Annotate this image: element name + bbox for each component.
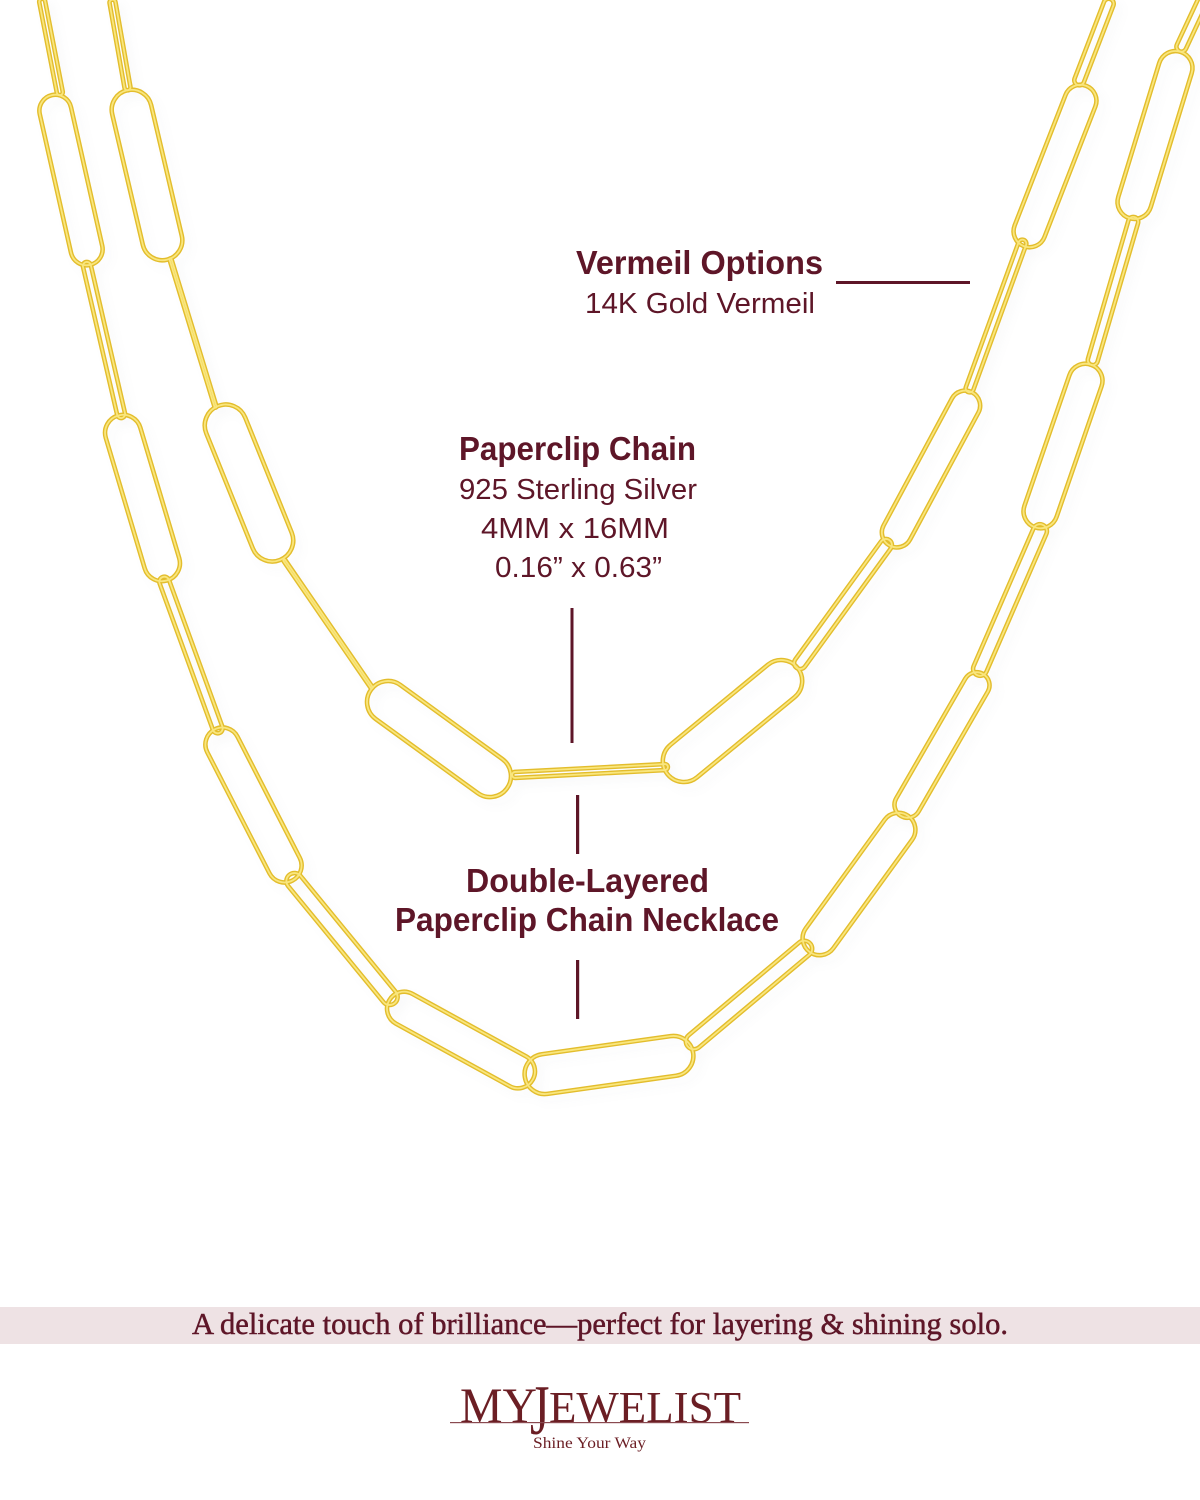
callout: paperclip chain specs	[459, 430, 697, 743]
callout: vermeil options: Vermeil Options	[576, 244, 823, 281]
callout: paperclip chain specs: 925 Sterling Silver	[459, 474, 697, 506]
necklace: double-layered gold paperclip chain	[36, 0, 1200, 1103]
callout: double-layered necklace title: Paperclip Chain Necklace	[395, 901, 779, 938]
logo: MyJewelist: Shine Your Way	[533, 1435, 646, 1452]
tagline band	[0, 1306, 1200, 1344]
logo: MyJewelist: J	[530, 1372, 549, 1450]
callout: vermeil options: 14K Gold Vermeil	[585, 288, 815, 320]
logo: MyJewelist: MY	[460, 1377, 537, 1433]
callout: vermeil options	[576, 244, 970, 320]
logo: MyJewelist	[450, 1372, 749, 1452]
callout: paperclip chain specs: 4MM x 16MM	[481, 513, 669, 545]
callout: paperclip chain specs: 0.16” x 0.63”	[495, 552, 662, 584]
callout: double-layered necklace title: Double-Layered	[466, 862, 709, 899]
callout: double-layered necklace title	[395, 795, 779, 1019]
logo: MyJewelist: EWELIST	[549, 1383, 741, 1432]
tagline band: A delicate touch of brilliance—perfect for layering & shining solo.	[192, 1306, 1008, 1341]
callout: paperclip chain specs: Paperclip Chain	[459, 430, 696, 467]
